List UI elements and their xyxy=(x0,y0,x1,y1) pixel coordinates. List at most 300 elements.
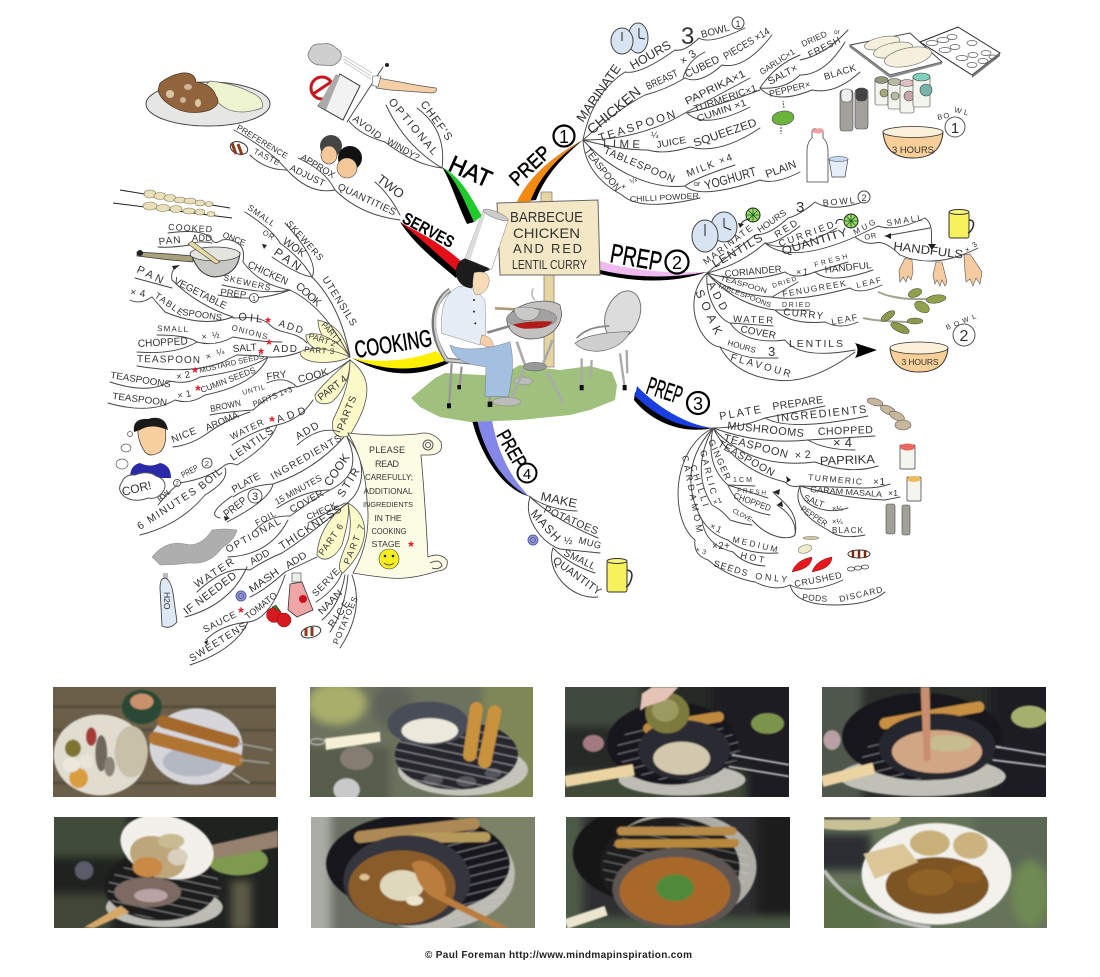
title text: LENTIL CURRY xyxy=(512,257,587,272)
prep 4 labels: MUG xyxy=(577,535,602,552)
prep 1 labels: JUICE xyxy=(656,135,687,151)
red asterisks: * xyxy=(195,382,201,398)
prep 3 labels: CHOPPED xyxy=(732,490,773,513)
prep 2 labels: OR xyxy=(864,231,878,242)
serves labels: APPROX xyxy=(298,152,337,181)
prep 3 labels: ×¼ xyxy=(832,504,843,513)
scroll text: CAREFULLY; xyxy=(365,472,413,482)
scroll text: ADDITIONAL xyxy=(364,487,413,496)
chair xyxy=(434,290,490,407)
icon: skewers xyxy=(113,190,232,218)
photo: finished curry with coriander xyxy=(566,817,790,928)
grass xyxy=(411,365,617,422)
prep 2 labels: QUANTITY xyxy=(780,226,849,258)
icon: turmeric tin xyxy=(907,476,921,501)
cooking labels: TABLE xyxy=(153,290,186,318)
red asterisks: * xyxy=(258,345,264,361)
cooking labels: PAN xyxy=(158,235,181,248)
circled 2: 2 xyxy=(861,193,867,203)
cooking labels: CHECK xyxy=(305,500,338,522)
prep 1 labels: BREAST xyxy=(644,67,681,93)
icon: hands xyxy=(899,254,982,286)
prep 2 labels: ×1 xyxy=(796,267,808,277)
hat labels xyxy=(350,96,454,164)
cooking labels: SWEETENS xyxy=(188,621,249,665)
circled digit text: 1 xyxy=(252,296,256,303)
cooking labels: SALT xyxy=(232,342,257,355)
scroll note xyxy=(348,433,447,578)
prep 3 labels: CARDAMOM xyxy=(680,454,705,533)
sign post xyxy=(541,192,554,367)
cooking labels: COVER xyxy=(288,488,326,516)
icon: wok with spatula xyxy=(137,241,240,277)
photo: curry with spoon and mushrooms xyxy=(311,817,535,928)
serves lines xyxy=(234,130,400,220)
prep 4 labels: QUANTITY xyxy=(550,555,604,598)
cooking labels: ADD xyxy=(248,548,272,568)
cooking labels: SAUCE xyxy=(201,610,238,636)
prep 3 labels: ONLY xyxy=(755,571,788,584)
branch: prep 2 xyxy=(600,191,982,381)
cooking labels: PART 7 xyxy=(342,523,367,566)
prep 3 labels: ×1 xyxy=(888,488,898,498)
prep 3 labels: INGREDIENTS xyxy=(776,404,867,425)
prep 4 lines xyxy=(528,497,600,597)
cooking labels: UTENSILS xyxy=(319,275,359,328)
cooking labels: FRY xyxy=(266,369,288,383)
icon: ginger and garlic xyxy=(797,536,819,555)
cooking labels: FOIL xyxy=(253,508,278,528)
prep 1 labels: MARINATE xyxy=(573,61,624,125)
part petals xyxy=(300,320,367,573)
prep 2 labels: COVER xyxy=(739,324,777,342)
prep 2 labels: DRIED xyxy=(771,275,798,290)
serves labels: TASTE xyxy=(252,147,281,167)
prep 1 labels: or xyxy=(834,29,841,36)
cooking labels: SMALL xyxy=(246,202,277,229)
cooking labels: OPTIONAL xyxy=(224,516,283,556)
circled 2 xyxy=(858,191,870,203)
branch: prep 4 xyxy=(472,420,632,598)
cooking labels: ONIONS xyxy=(230,323,269,342)
cooking labels: CUMIN SEEDS xyxy=(199,365,257,395)
cooking labels: SERVE xyxy=(310,566,342,599)
serves labels: ADJUST xyxy=(288,163,327,189)
cooking labels: RICE xyxy=(326,599,353,630)
heading: HAT: HAT xyxy=(445,151,496,194)
prep 1 labels: TURMERIC×1 xyxy=(692,83,758,115)
prep 1 labels: SALT× xyxy=(766,63,800,88)
icon: salt and pepper shakers xyxy=(840,88,868,131)
cooking labels: ADD xyxy=(192,233,212,243)
icon: clocks xyxy=(611,23,648,54)
title text: CHICKEN xyxy=(513,225,580,241)
serves labels: QUANTITIES xyxy=(336,182,398,218)
prep 2 labels: SOAK xyxy=(692,287,725,337)
prep 3 labels: CRUSHED xyxy=(793,570,843,589)
cooking labels: WATER xyxy=(228,417,266,442)
prep 2 labels: SMALL xyxy=(886,212,923,228)
serves labels: TWO xyxy=(374,171,407,201)
prep 1 labels: CUBED xyxy=(683,54,722,81)
cooking labels: AROMA xyxy=(204,410,241,434)
prep 1 labels xyxy=(573,23,858,204)
prep 2 labels: HANDFULS xyxy=(893,239,964,262)
circled 1 in bowl label: 1 xyxy=(735,19,741,29)
icon: milk bottle xyxy=(807,128,828,182)
prep 2 labels: CURRY xyxy=(783,307,824,322)
icon: bowl 2 label: BOWL xyxy=(945,313,978,332)
cooking labels: MUSTARD SEEDS xyxy=(198,351,265,375)
prep 1 labels: PIECES ×14 xyxy=(721,25,772,63)
heading: PREP 2: 2 xyxy=(672,253,682,273)
prep 3 labels: SEEDS xyxy=(712,558,749,578)
heading: PREP 1 xyxy=(505,126,574,191)
circled digit text: 2 xyxy=(175,482,179,488)
heading: SERVES: SERVES xyxy=(399,209,457,252)
cooking labels: PREP xyxy=(221,495,249,520)
photo: ingredients on plate with skewers xyxy=(53,687,276,797)
prep 3 labels: PREPARE xyxy=(772,394,824,413)
branch: prep 3 xyxy=(634,372,921,605)
icon: bowl 1 label: 1 xyxy=(951,120,959,137)
prep 1 labels: PEPPER× xyxy=(768,79,811,99)
prep 2 labels: 3 xyxy=(796,199,804,216)
prep 1 labels: BLACK xyxy=(823,63,858,83)
icon: yoghurt pot xyxy=(829,156,848,177)
cooking labels: COOKED xyxy=(168,222,213,234)
prep 2 labels: LEAF xyxy=(830,312,858,327)
heading: PREP 4: PREP xyxy=(492,426,531,472)
cooking labels: NICE xyxy=(170,426,199,446)
heading: PREP 1: PREP xyxy=(505,142,556,191)
cooking labels: ADD xyxy=(275,405,308,426)
icon: COR thought cloud: COR! xyxy=(120,478,153,499)
icon: tomatoes xyxy=(266,605,291,627)
branch: cooking xyxy=(108,190,449,665)
central illustration: chef at barbecue xyxy=(411,192,647,422)
cooking labels: BROWN xyxy=(209,398,242,414)
icon: bowl 3 hours xyxy=(890,342,948,372)
cooking labels: TOMATO xyxy=(243,590,280,622)
prep 3 labels: PLATE xyxy=(718,404,762,423)
cooking labels: CHICKEN xyxy=(246,259,290,288)
branch: serves xyxy=(228,123,465,278)
prep 4 labels xyxy=(528,489,604,598)
prep 3 labels: ×1 xyxy=(873,477,885,488)
cooking labels: 6 MINUTES xyxy=(135,485,199,533)
icon: man smelling aroma xyxy=(130,418,171,478)
cooking labels: ADD xyxy=(294,420,322,443)
red asterisks xyxy=(192,314,275,620)
prep 4 labels: ½ xyxy=(564,536,573,547)
icon: mug xyxy=(607,558,632,592)
red asterisks: * xyxy=(192,364,198,380)
prep 2 labels xyxy=(692,195,979,380)
prep 1 labels: ×¼ xyxy=(619,175,639,192)
heading: PREP 4: 4 xyxy=(523,466,531,483)
scroll text: COOKING xyxy=(372,527,406,536)
prep 2 labels: CORIANDER xyxy=(724,264,782,280)
cooking labels: TEASPOON xyxy=(137,354,200,366)
scroll text: STAGE xyxy=(372,539,401,549)
serves labels: PREFERENCE xyxy=(235,123,289,161)
red asterisks: * xyxy=(269,413,275,429)
illustration: plate of curry and mash xyxy=(146,73,270,126)
prep 3 labels: GARAM MASALA xyxy=(810,485,883,499)
cooking labels: INGREDIENTS xyxy=(269,433,344,483)
cooking labels: ADD xyxy=(284,550,309,572)
prep 1 labels: CHILLI POWDER xyxy=(630,191,699,204)
icon: COR thought cloud xyxy=(116,432,165,500)
prep 2 labels: RED xyxy=(773,218,800,241)
cooking labels: NAAN xyxy=(316,588,345,617)
chef xyxy=(434,207,533,408)
icon: bowl 2 label: 2 xyxy=(960,328,969,345)
cooking labels: PAN xyxy=(135,264,165,287)
prep 1 labels: HOURS xyxy=(628,38,673,73)
prep 1 branch stroke xyxy=(517,140,583,202)
cooking labels: PART 6 xyxy=(316,522,345,557)
cooking labels: PREP xyxy=(179,462,200,480)
prep 2 labels: TABLESPOONS xyxy=(716,282,772,309)
icon: curry leaf sprig xyxy=(863,309,923,336)
cooking labels: PART 3 xyxy=(304,345,335,356)
icon: mug xyxy=(949,210,974,238)
prep 3 labels: MEDIUM xyxy=(732,534,779,554)
arrow: teaspoon junction xyxy=(786,476,791,483)
cooking labels: SPOONS xyxy=(182,307,223,323)
cooking labels: PART 1 xyxy=(320,320,344,346)
icon: no chef hat symbol xyxy=(311,74,360,120)
prep 2 labels: FLAVOUR xyxy=(729,352,792,380)
prep 1 labels: FRESH xyxy=(806,35,843,61)
prep 3 labels: TURMERIC xyxy=(808,472,862,487)
cooking labels: PART 4 xyxy=(316,373,350,403)
prep 3 labels: CHILLI xyxy=(688,464,711,508)
cooking labels: OIL xyxy=(238,311,263,325)
heading: PREP 3: PREP xyxy=(643,372,686,410)
prep 3 labels xyxy=(680,394,898,604)
prep 3 labels: MUSHROOMS xyxy=(727,420,805,440)
cooking labels: ×½ xyxy=(201,330,221,342)
cooking labels: STIR xyxy=(335,466,363,500)
cooking labels: PARTS 1+3 xyxy=(251,385,294,409)
cooking labels: COOK xyxy=(297,366,330,386)
cooking labels: IF NEEDED xyxy=(182,570,239,617)
prep 1 labels: TABLESPOON xyxy=(602,145,676,185)
cooking labels: ADD xyxy=(277,318,304,337)
circled digit text: 2 xyxy=(205,459,209,468)
hat labels: WINDY? xyxy=(384,136,421,164)
icon: bowl: 3 HOURS xyxy=(892,145,934,156)
prep 3 labels: PODS xyxy=(802,592,828,604)
arrowheads xyxy=(773,489,783,507)
prep 3 labels: CLOVE xyxy=(731,508,753,524)
prep 3 labels: TEASPOON xyxy=(722,432,789,461)
icon: clocks xyxy=(692,212,737,252)
prep 3 labels: ×1 xyxy=(712,495,723,507)
cooking labels: THICKNESS xyxy=(277,503,344,553)
prep 3 branch stroke xyxy=(634,386,713,430)
cooking labels: CHOPPED xyxy=(138,335,188,350)
icon: chillies xyxy=(792,557,832,572)
prep 3 labels: ×2+ xyxy=(712,541,730,552)
prep 2 labels: ×3 xyxy=(963,240,979,255)
red asterisks: * xyxy=(238,604,244,620)
icon: capsule xyxy=(228,139,250,157)
scroll text: READ xyxy=(375,459,400,469)
cooking labels: WATER xyxy=(192,556,237,591)
icon: herb sprig xyxy=(878,287,946,315)
icon: smiley xyxy=(379,549,399,569)
scroll text xyxy=(363,445,413,549)
icon: lime wheel xyxy=(844,214,858,228)
prep 3 labels: FRESH xyxy=(737,487,767,497)
prep 1 labels: DRIED xyxy=(800,29,828,49)
icon: spiral xyxy=(528,535,538,545)
prep 2 labels: FENUGREEK xyxy=(782,278,847,299)
cooking labels: POTATOES xyxy=(331,595,360,646)
cooking labels: ADD xyxy=(273,344,297,355)
icon: capsule xyxy=(848,550,870,558)
prep 3 labels: CHOPPED xyxy=(818,424,873,438)
scroll text: PLEASE xyxy=(369,445,405,455)
prep 3 labels: SALT xyxy=(802,493,826,510)
branch: hat xyxy=(308,44,496,224)
prep 2 labels: TEASPOON xyxy=(719,275,768,295)
icon: foil xyxy=(152,529,237,565)
icon: tray of onions xyxy=(920,27,1000,78)
icon: capsule xyxy=(300,624,322,640)
prep 3 labels: DISCARD xyxy=(838,584,883,604)
prep 1 labels: 3 xyxy=(681,23,694,50)
icon: bowl 2 label xyxy=(945,313,978,346)
prep 3 lines xyxy=(678,406,900,605)
prep 4 labels: MASH xyxy=(528,507,564,544)
prep 1 labels: PLAIN xyxy=(764,159,798,181)
prep 2 labels: MUG xyxy=(852,218,877,237)
icon: pepper shakers xyxy=(886,504,910,535)
cooking labels: MASH xyxy=(247,566,282,595)
photo: stirring wok on grill xyxy=(822,687,1046,797)
prep 4 labels: MAKE xyxy=(539,489,578,511)
prep 2 labels: WATER xyxy=(733,314,773,326)
hat branch stroke xyxy=(442,167,482,224)
icon: lime wheel xyxy=(746,208,760,222)
cooking labels: BOIL xyxy=(196,466,225,492)
prep 2 branch stroke xyxy=(600,261,707,281)
prep 3 labels: TEASPOON xyxy=(716,438,776,479)
arrow: big arrowhead xyxy=(855,343,877,358)
cooking labels xyxy=(110,202,367,665)
serves labels xyxy=(235,123,407,218)
hat labels: OPTIONAL xyxy=(386,96,440,158)
icon: tomato ketchup bottle xyxy=(288,573,313,617)
cooking labels: OR xyxy=(261,228,276,242)
photo: adding plate of ingredients xyxy=(54,817,278,928)
arrows xyxy=(738,219,936,250)
heading: PREP 1: 1 xyxy=(559,127,569,147)
prep 2 labels: HOURS xyxy=(726,338,757,355)
cooking labels: WOK xyxy=(280,236,308,260)
cooking labels: ×1 xyxy=(176,388,192,402)
icon: pointing finger xyxy=(372,63,436,93)
prep 3 labels: BLACK xyxy=(832,526,864,535)
cooking labels: ×¼ xyxy=(204,346,226,362)
title sign xyxy=(497,200,600,275)
cooking labels: TEASPOONS xyxy=(110,370,172,391)
prep 1 labels: YOGHURT xyxy=(703,164,758,193)
photo: served plate with naan xyxy=(824,817,1047,928)
icon: bowl 3 hours: 3 HOURS xyxy=(902,357,939,367)
cooking labels: COOK xyxy=(293,280,324,310)
cooking labels: TEASPOON xyxy=(112,391,168,409)
prep 2 labels: BOWL xyxy=(822,195,855,208)
hat labels: CHEF'S xyxy=(418,99,454,143)
prep 2 labels: LENTILS xyxy=(789,338,843,350)
title text: BARBECUE xyxy=(510,209,583,226)
prep 1 labels: ×3 xyxy=(678,48,699,67)
icon: spice jars xyxy=(875,73,932,113)
prep 3 labels: GARLIC xyxy=(698,449,719,496)
icon: spiral xyxy=(236,591,246,601)
prep 2 labels: DRIED xyxy=(782,302,810,309)
cooking labels: PART 2 xyxy=(307,331,337,349)
icon: bowl 1 label xyxy=(937,105,969,137)
cooking labels: PREP xyxy=(220,287,247,301)
prep 2 labels: LEAF xyxy=(855,276,882,290)
prep 3 labels: ×¼ xyxy=(832,517,843,526)
circled digit text xyxy=(175,296,258,503)
cooking labels: PARTS xyxy=(336,394,359,432)
prep 1 labels: TEASPOON xyxy=(597,109,677,145)
prep 2 labels: 3 xyxy=(768,344,775,359)
prep 3 labels: 1CM xyxy=(733,477,752,484)
prep 2 labels: FRESH xyxy=(814,253,848,269)
cooking labels: COOK xyxy=(321,451,353,489)
icon: cloud xyxy=(308,44,341,66)
circled 1 in bowl label xyxy=(732,17,744,29)
cooking labels: ×4 xyxy=(130,287,146,300)
prep 3 labels: ×3 xyxy=(694,546,707,557)
photo: wok of onions with skewers xyxy=(310,687,533,797)
red asterisks: * xyxy=(265,314,271,330)
empty chair xyxy=(575,286,647,390)
cooking labels: ×2 xyxy=(175,369,191,383)
icon: mushrooms xyxy=(866,397,911,430)
heading: COOKING: COOKING xyxy=(353,325,434,364)
prep 1 labels: CHICKEN xyxy=(584,83,644,137)
prep 1 labels: SQUEEZED xyxy=(692,117,758,150)
prep 2 lines xyxy=(694,202,978,381)
cooking labels: LENTILS xyxy=(228,425,276,463)
arrowheads xyxy=(172,244,267,645)
cooking branch stroke xyxy=(352,351,449,373)
hat labels: AVOID xyxy=(350,114,383,142)
cooking labels: VEGETABLE xyxy=(172,276,229,312)
cooking labels: PAN xyxy=(271,245,304,274)
prep 2 labels: HOURS xyxy=(755,208,788,235)
copyright footer: © Paul Foreman http://www.mindmapinspiration.com xyxy=(425,950,692,961)
prep 3 labels: ×4 xyxy=(833,435,852,450)
branch: prep 1 xyxy=(505,17,1000,204)
circled numbers xyxy=(174,294,262,503)
cooking labels: PLATE xyxy=(230,471,263,496)
serves branch stroke xyxy=(400,222,465,278)
prep 3 labels: PEPPER xyxy=(799,503,829,528)
prep 4 labels: POTATOES xyxy=(542,504,600,537)
